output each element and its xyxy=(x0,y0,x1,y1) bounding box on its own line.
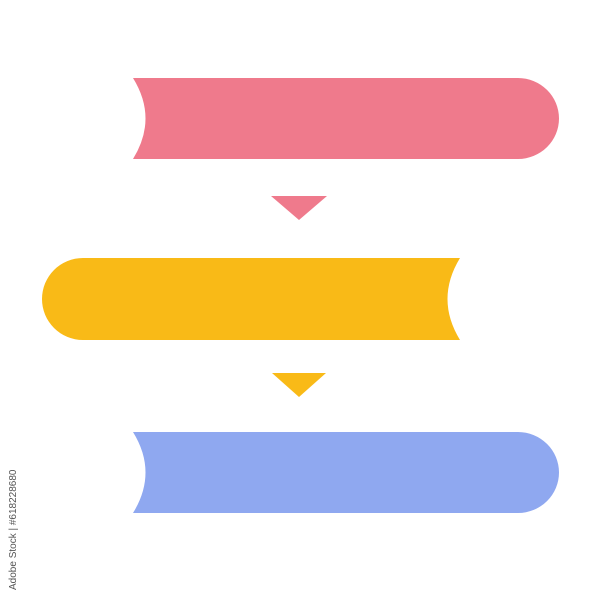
arrow: pink triangle xyxy=(271,196,327,220)
bar: blue step 3 xyxy=(133,432,559,513)
bar: pink step 1 xyxy=(133,78,559,159)
bar: yellow step 2 xyxy=(42,258,460,340)
arrow: yellow triangle xyxy=(272,373,326,397)
text: stock id vertical: Adobe Stock | #618228680 xyxy=(8,469,19,590)
